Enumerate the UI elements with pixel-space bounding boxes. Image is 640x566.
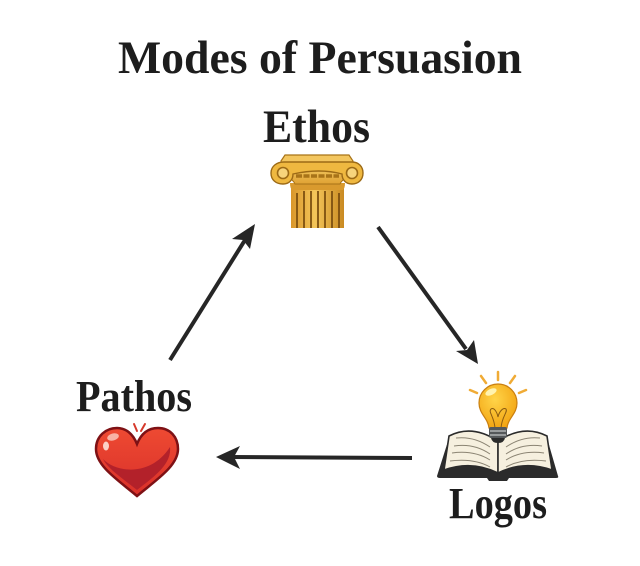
icon: light bulb: [479, 384, 517, 443]
arrow: Logos to Pathos: [216, 446, 412, 469]
arrow: Pathos to Ethos: [170, 224, 255, 360]
label: Ethos: Ethos: [263, 101, 370, 153]
label: Pathos: Pathos: [76, 372, 192, 421]
icon: red heart: [96, 424, 178, 496]
icon: bulb rays: [470, 372, 526, 393]
title: Modes of Persuasion: [118, 32, 522, 84]
icon: golden ionic column: [271, 155, 363, 228]
icon: open book: [437, 431, 558, 481]
label: Logos: Logos: [449, 479, 547, 528]
arrow: Ethos to Logos: [378, 227, 478, 364]
icon: light bulb over open book: [437, 372, 558, 481]
